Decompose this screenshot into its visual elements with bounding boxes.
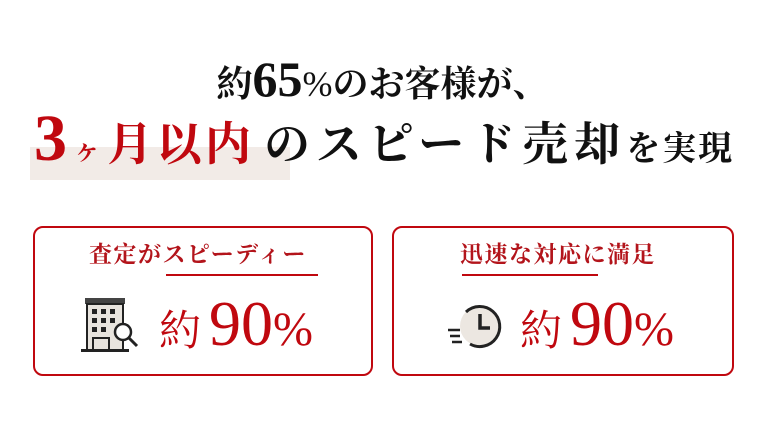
- card title: 迅速な対応に満足: [460, 242, 656, 267]
- card title: 査定がスピーディー: [89, 242, 307, 267]
- card: quick response: [392, 226, 734, 376]
- stat: about 90%: 約90%: [520, 288, 674, 359]
- headline line 2: 3ヶ月以内のスピード売却を実現: [34, 102, 734, 175]
- icon: building with magnifier: [81, 298, 138, 352]
- card: assessment speed: [33, 226, 373, 376]
- headline line 1: 約65%のお客様が、: [216, 51, 549, 107]
- icon: clock: [448, 305, 502, 348]
- highlight background: [30, 147, 290, 180]
- stat: about 90%: 約90%: [159, 288, 313, 359]
